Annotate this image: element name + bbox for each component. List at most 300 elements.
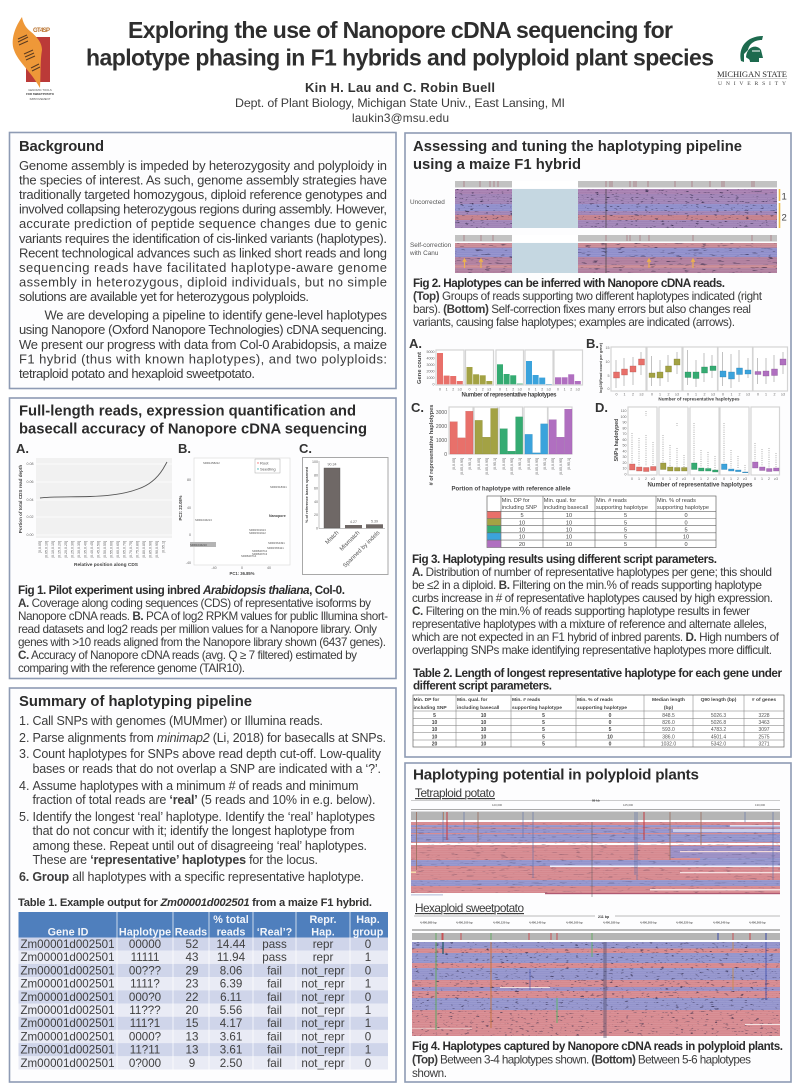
table 1: fail	[267, 1017, 282, 1030]
chart 3D: SNPs boxplots: ≥3	[774, 477, 778, 481]
legend table: script parameters: 10	[566, 513, 572, 519]
caption: figure 2: variants, causing false haplotypes; examples are indicated (arrows).	[413, 316, 735, 329]
table 1: 1	[365, 951, 371, 964]
table 1: fail	[267, 964, 282, 977]
chart 3A: gene count bars: 2	[512, 388, 514, 392]
chart 3B: read count boxplots: 0	[757, 392, 759, 396]
legend table: script parameters: including basecall	[544, 505, 588, 511]
chart A: coverage line: (0.95,1]	[162, 541, 166, 553]
table 2: 10	[432, 727, 437, 733]
logo: Michigan State University: MICHIGAN STATE	[717, 69, 787, 79]
chart 3C: reference allele bars: (0,0.05]	[452, 458, 456, 470]
table 1: Zm00001d002501	[20, 978, 115, 991]
caption: figure 1: genes with >10 reads aligned from the Nanopore library shown (6437 genes).	[18, 636, 386, 649]
table 2: supporting haplotype	[512, 705, 562, 711]
chart A: coverage line: (0.10,0.15]	[51, 541, 55, 558]
table 2: Q90 length (bp)	[701, 697, 737, 703]
table 1: 23	[186, 978, 198, 991]
logo: GT4SP: GENOMIC TOOLS	[28, 88, 52, 92]
caption: figure 3: representative haplotypes with a mixture of reference and alternate alleles,	[412, 618, 767, 631]
table 2: 3463	[758, 720, 770, 726]
chart 3B: read count boxplots: 0	[616, 392, 618, 396]
chart 3D: SNPs boxplots: 0	[693, 477, 695, 481]
chart 3D: SNPs boxplots: 0	[662, 477, 664, 481]
caption: figure 4	[412, 1040, 783, 1080]
table 1: fail	[267, 1004, 282, 1017]
table 2: Min. DP for	[414, 697, 439, 703]
caption: figure 3: overlapping SNPs make identifying representative haplotypes more difficult.	[412, 644, 772, 657]
table 1: Haplotype	[119, 926, 171, 938]
table 1: 3.61	[220, 1030, 242, 1043]
table 2: 10	[432, 720, 437, 726]
chart 3D: SNPs boxplots: ≥3	[682, 477, 686, 481]
chart 3B: read count boxplots: 2	[668, 392, 670, 396]
chart 3D: SNPs boxplots: 30	[622, 455, 626, 459]
chart 3A: gene count bars: 0	[499, 388, 501, 392]
chart A: coverage line: (0.05,0.10]	[44, 541, 48, 558]
table 1: Zm00001d002501	[20, 1004, 115, 1017]
table 1: 0	[365, 1030, 371, 1043]
chart C: accuracy bars: C.	[299, 441, 312, 456]
chart 3C: reference allele bars: C.	[411, 400, 424, 415]
table 2: 20	[432, 742, 437, 748]
table 1: Hap.	[311, 926, 335, 938]
table 1: 11???	[129, 1004, 161, 1017]
table 2: 4783.2	[711, 727, 726, 733]
table 2: 0	[609, 742, 612, 748]
text block: background paragraphs: using Nanopore (Oxford Nanopore Technologies) cDNA sequencing.	[19, 322, 387, 337]
legend table: script parameters: 5	[624, 535, 627, 541]
text block: background paragraphs: variants requires the identification of cis-linked variants (haplotypes).	[19, 231, 387, 246]
figure 4 bottom: sweetpotato reads: 4,400,100 bp	[456, 920, 473, 924]
table 1: 11?11	[130, 1044, 160, 1057]
table 1: Reads	[175, 926, 207, 938]
table 1: 0	[365, 991, 371, 1004]
table 2: supporting haplotype	[577, 705, 627, 711]
table 2: Min. qual. for	[457, 697, 488, 703]
table 1: 00000	[129, 938, 161, 951]
legend table: script parameters: supporting haplotype	[657, 505, 709, 511]
chart 3C: reference allele bars: (0.95,1]	[468, 458, 472, 470]
table 1: fail	[267, 1044, 282, 1057]
chart A: coverage line: (0.85,0.90]	[148, 541, 152, 558]
chart B: PCA: 40	[267, 566, 271, 570]
affiliation: Dept. of Plant Biology, Michigan State Univ., East Lansing, MI	[235, 96, 565, 110]
table 1: 43	[186, 951, 198, 964]
chart A: coverage line: (0.25,0.30]	[70, 541, 74, 558]
table 1: 9	[189, 1057, 195, 1070]
heading: assessing and tuning: Assessing and tuning the haplotyping pipeline	[413, 139, 742, 155]
table 1: Zm00001d002501	[20, 938, 115, 951]
chart C: accuracy bars: 5.39	[371, 520, 378, 524]
legend table: script parameters: 0	[684, 542, 688, 548]
figure 4 bottom: sweetpotato reads: 211 bp	[598, 915, 610, 919]
chart 3A: gene count bars: 2	[452, 388, 454, 392]
figure 2: read alignments	[409, 181, 787, 273]
chart 3D: SNPs boxplots: D.	[595, 400, 608, 415]
list: pipeline steps: 2.	[19, 731, 29, 745]
text block: background paragraphs: tetraploid potato and hexaploid sweetpotato.	[19, 366, 255, 381]
chart A: coverage line: (0.50,0.55]	[103, 541, 107, 558]
table 1: 52	[186, 938, 198, 951]
table 1: 13	[186, 1044, 198, 1057]
chart B: PCA: SRR1046213	[195, 518, 212, 522]
table 2: 10	[481, 713, 486, 719]
chart C: accuracy bars: 90.34	[328, 462, 336, 466]
chart C: accuracy bars: 100	[312, 460, 318, 464]
heading: assessing and tuning	[413, 139, 742, 173]
chart 3A: gene count bars: ≥3	[458, 388, 462, 392]
heading: full-length reads: Full-length reads, expression quantification and	[19, 404, 356, 420]
caption: figure 2	[413, 277, 763, 329]
chart C: accuracy bars: Spanned by indels	[342, 530, 381, 569]
table 1: group	[353, 926, 384, 938]
caption: figure 4: (Top) Between 3-4 haplotypes shown. (Bottom) Between 5-6 haplotypes	[412, 1054, 751, 1066]
table 1: % total	[213, 914, 249, 926]
chart 3A: gene count bars: Number of representative haplotypes	[462, 392, 557, 398]
chart 3C: reference allele bars: (0.95,1]	[493, 458, 497, 470]
chart 3B: read count boxplots: ≥3	[640, 392, 643, 396]
table 2	[413, 695, 784, 748]
table 1: 0	[365, 1057, 371, 1070]
figure 2: read alignments: 2	[782, 212, 787, 224]
chart 3A: gene count bars: ≥3	[487, 388, 491, 392]
chart C: accuracy bars: 0	[316, 526, 318, 530]
panel: background	[10, 132, 396, 388]
figure 4 bottom: sweetpotato reads: 4,400,080 bp	[420, 920, 437, 924]
chart B: PCA: SRR1501913	[249, 528, 266, 532]
chart 3A: gene count bars: ≥3	[547, 388, 551, 392]
chart 3D: SNPs boxplots: 0	[624, 472, 626, 476]
chart 3C: reference allele bars: 3000	[436, 410, 447, 416]
chart 3D: SNPs boxplots: 2	[768, 477, 770, 481]
table 2: 386.0	[662, 734, 675, 740]
chart A: coverage line: 0.00	[26, 533, 34, 537]
chart C: accuracy bars: 60	[314, 487, 318, 491]
table 1: not_repr	[301, 1044, 345, 1057]
chart 3B: read count boxplots: 0	[608, 387, 610, 391]
table 1: fail	[267, 1057, 282, 1070]
chart 3B: read count boxplots: 2	[704, 392, 706, 396]
legend table: script parameters: 20	[519, 542, 525, 548]
figure 4 bottom: sweetpotato reads: 4,400,120 bp	[493, 920, 510, 924]
table 2: 5342.0	[711, 742, 726, 748]
figure 4 top: potato reads	[411, 798, 780, 897]
chart A: coverage line: (0.30,0.35]	[77, 541, 81, 558]
chart B: PCA: Nanopore	[269, 514, 286, 518]
legend table: script parameters: 10	[566, 542, 572, 548]
chart 3D: SNPs boxplots: 1	[761, 477, 763, 481]
legend table: script parameters: 0	[684, 520, 688, 526]
chart B: PCA: SRR849712	[252, 549, 268, 553]
chart B: PCA: Seedling	[260, 466, 276, 472]
table 2: 3097	[758, 727, 770, 733]
caption: figure 1: Fig 1. Pilot experiment using inbred Arabidopsis thaliana, Col-0.	[18, 584, 345, 597]
caption: figure 1: comparing with the reference genome (TAIR10).	[18, 662, 245, 675]
chart 3C: reference allele bars: (0,0.05]	[502, 458, 506, 470]
chart 3C: reference allele bars: (0.05,0.95]	[559, 458, 563, 475]
right bars	[778, 189, 780, 228]
table 2: 5	[433, 713, 436, 719]
chart 3A: gene count bars: 2	[482, 388, 484, 392]
table 1: Zm00001d002501	[20, 991, 115, 1004]
caption: figure 3: which are not expected in an F1 hybrid of inbred parents. D. High numbers of	[411, 631, 780, 644]
table title: table 1: Table 1. Example output for Zm00001d002501 from a maize F1 hybrid.	[18, 897, 372, 909]
chart B: PCA: PC2: 22.08%	[178, 495, 183, 520]
chart 3D: SNPs boxplots: 2	[645, 477, 647, 481]
chart 3D: SNPs boxplots: 80	[622, 426, 626, 430]
table 1: ‘Real’?	[257, 926, 292, 938]
table 2: 848.5	[662, 713, 675, 719]
table 1: fail	[267, 1030, 282, 1043]
figure 2: read alignments: Uncorrected	[410, 199, 445, 206]
chart A: coverage line: (0.35,0.40]	[84, 541, 88, 558]
chart 3A: gene count bars: 4000	[426, 356, 434, 360]
chart 3B: read count boxplots: 5	[608, 374, 610, 378]
legend table: script parameters: 0	[684, 513, 688, 519]
list: pipeline steps: 6. Group all haplotypes with a specific representative haplotype.	[19, 870, 364, 884]
chart B: PCA: 0	[241, 566, 243, 570]
text block: background paragraphs: sequencing reads have facilitated haplotype-aware genome	[19, 260, 387, 275]
chart B: PCA: SRR849713	[252, 552, 268, 556]
caption: figure 1: A. Coverage along coding sequences (CDS) of representative isoforms by	[18, 597, 371, 610]
figure 4 top: potato reads: 89 kb	[592, 798, 600, 802]
table 1: 1	[365, 1017, 371, 1030]
legend table: script parameters: 10	[519, 528, 525, 534]
chart 3A: gene count bars: 2	[570, 388, 572, 392]
table 1: Zm00001d002501	[20, 951, 115, 964]
chart B: PCA: SRR849714	[241, 554, 257, 558]
chart A: coverage line	[16, 441, 172, 568]
chart 3D: SNPs boxplots: 10	[622, 467, 626, 471]
text block: background paragraphs: Recent technological advances such as linked short reads and long	[19, 245, 387, 260]
chart A: coverage line: (0.70,0.75]	[129, 541, 133, 558]
chart 3C: reference allele bars	[411, 400, 572, 492]
text block: background paragraphs: accurate prediction of peptide sequence changes due to genic	[19, 216, 388, 231]
table 2: 2575	[758, 734, 770, 740]
chart 3D: SNPs boxplots: 2	[707, 477, 709, 481]
chart 3A: gene count bars: 1000	[426, 376, 434, 380]
table 2: 10	[481, 734, 486, 740]
chart 3B: read count boxplots: log10(Read count per gene)	[599, 342, 603, 393]
table 2: 10	[481, 727, 486, 733]
table 2: Min. # reads	[512, 697, 541, 703]
table 2: # of genes	[752, 697, 776, 703]
chart A: coverage line: (0.20,0.25]	[64, 541, 68, 558]
subheading: tetraploid potato: Tetraploid potato	[415, 786, 495, 800]
table 2: 0	[609, 713, 612, 719]
chart B: PCA: SRR1565421	[267, 546, 284, 550]
caption: figure 3: be ≤2 in a diploid. B. Filtering on the min.% of reads supporting haplotype	[412, 579, 762, 592]
chart 3B: read count boxplots: 1	[659, 392, 661, 396]
table 1: 14.44	[216, 938, 246, 951]
chart C: accuracy bars: 40	[314, 500, 318, 504]
chart 3D: SNPs boxplots: 90	[622, 421, 626, 425]
legend table: script parameters: Min. # reads	[596, 498, 627, 504]
chart A: coverage line: (0.60,0.65]	[116, 541, 120, 558]
table 1: fail	[267, 978, 282, 991]
legend table: script parameters: 10	[519, 520, 525, 526]
caption: figure 3: A. Distribution of number of representative haplotypes per gene; this should	[412, 566, 772, 579]
chart 3B: read count boxplots: ≥3	[711, 392, 715, 396]
text block: background paragraphs: traditionally targeted homozygous, diploid reference genotypes and	[19, 187, 387, 202]
legend table: script parameters: supporting haplotype	[596, 505, 648, 511]
chart 3A: gene count bars: 1	[564, 388, 566, 392]
chart 3D: SNPs boxplots: 0	[754, 477, 756, 481]
table 1: fail	[267, 991, 282, 1004]
chart 3B: read count boxplots: B.	[586, 336, 599, 351]
table 2: 5026.8	[711, 720, 726, 726]
table 1: 111?1	[130, 1017, 160, 1030]
chart C: accuracy bars: 80	[314, 473, 318, 477]
list: pipeline steps: bases or reads that do not overlap a SNP are indicated with a ‘?’.	[32, 762, 381, 776]
text block: background paragraphs: the species of interest. As such, genome assembly strategies have	[19, 173, 387, 188]
figure 2: read alignments: 1	[782, 192, 787, 202]
figure 4 bottom: sweetpotato reads: 4,400,200 bp	[640, 920, 657, 924]
table 1: not_repr	[301, 1057, 345, 1070]
chart C: accuracy bars: 4.27	[350, 520, 357, 524]
panel: full-length reads	[10, 398, 396, 678]
legend table: script parameters: 5	[520, 513, 524, 519]
list: pipeline steps: These are ‘representative’ haplotypes for the locus.	[32, 853, 318, 867]
chart 3A: gene count bars: 1	[535, 388, 537, 392]
list: pipeline steps: Identify the longest ‘real’ haplotype. Identify the ‘real’ haplotypes	[32, 810, 375, 824]
chart 3B: read count boxplots: 10	[606, 360, 610, 364]
text block: background paragraphs: solutions are available yet for heterozygous polyploids.	[19, 289, 309, 304]
chart 3D: SNPs boxplots: SNPs haplotyped	[614, 419, 620, 461]
chart B: PCA: B.	[178, 441, 191, 456]
chart 3D: SNPs boxplots: 100	[620, 415, 626, 419]
chart 3C: reference allele bars: (0.05,0.95]	[460, 458, 464, 475]
list: pipeline steps: that do not concur with it; identify the longest haplotype from	[32, 824, 354, 838]
table 2: 5	[542, 720, 545, 726]
figure 4 bottom: sweetpotato reads: 4,400,160 bp	[566, 920, 583, 924]
table 1: Zm00001d002501	[20, 1017, 115, 1030]
table 1: repr	[313, 951, 333, 964]
legend table: script parameters: including SNP	[502, 505, 537, 511]
chart A: coverage line: Portion of total CDS read depth	[18, 465, 23, 533]
chart A: coverage line: [0,0.05]	[38, 541, 42, 553]
chart B: PCA: 0	[189, 533, 191, 537]
chart A: coverage line: A.	[16, 441, 29, 456]
email: laukin3@msu.edu	[352, 111, 449, 125]
table 1: 8.06	[220, 964, 242, 977]
title: haplotype phasing in F1 hybrids and polyploid plant species	[86, 44, 714, 70]
chart 3A: gene count bars: 2	[541, 388, 543, 392]
list: pipeline steps: Assume haplotypes with a minimum # of reads and minimum	[32, 779, 358, 793]
chart 3B: read count boxplots: 2	[774, 392, 776, 396]
caption: figure 1: C. Accuracy of Nanopore cDNA reads (avg. Q ≥ 7 filtered) estimated by	[18, 649, 357, 662]
chart A: coverage line: (0.40,0.45]	[90, 541, 94, 558]
chart A: coverage line: (0.65,0.70]	[122, 541, 126, 558]
logo: GT4SP: IMPROVEMENT	[30, 97, 51, 101]
table 1: 6.11	[220, 991, 242, 1004]
table 2: 5	[542, 734, 545, 740]
list: pipeline steps: Call SNPs with genomes (MUMmer) or Illumina reads.	[32, 714, 323, 728]
chart 3A: gene count bars: 0	[528, 388, 530, 392]
chart 3C: reference allele bars: 0	[444, 452, 447, 458]
table 1: 5.56	[220, 1004, 242, 1017]
chart 3C: reference allele bars: (0,0.05]	[527, 458, 531, 470]
figure 2: read alignments: with Canu	[409, 250, 439, 257]
chart 3A: gene count bars: 0	[432, 382, 434, 386]
heading: full-length reads: basecall accuracy of Nanopore cDNA sequencing	[19, 422, 367, 438]
table 1: 0000?	[129, 1030, 162, 1043]
chart 3C: reference allele bars: (0.95,1]	[543, 458, 547, 470]
table 1: Hap.	[356, 914, 380, 926]
table 2: 826.0	[662, 720, 675, 726]
list: pipeline steps: among these. Repeat until out of disagreeing ‘real’ haplotypes.	[32, 839, 367, 853]
legend table: script parameters: 5	[624, 520, 627, 526]
table 2: Min. % of reads	[577, 697, 613, 703]
chart 3C: reference allele bars: (0.05,0.95]	[510, 458, 514, 475]
chart 3D: SNPs boxplots: 110	[621, 409, 626, 413]
table 1: Zm00001d002501	[20, 964, 115, 977]
heading: background: Background	[19, 139, 104, 155]
chart 3B: read count boxplots: 0	[651, 392, 653, 396]
table 1: 15	[186, 1017, 198, 1030]
chart 3C: reference allele bars: Portion of haplotype with reference allele	[452, 486, 571, 492]
figure 4 bottom: sweetpotato reads: 4,400,180 bp	[603, 920, 620, 924]
table 1: pass	[262, 938, 287, 951]
figure 4 bottom: sweetpotato reads: 4,400,140 bp	[529, 920, 546, 924]
chart 3D: SNPs boxplots: 2	[676, 477, 678, 481]
chart 3B: read count boxplots: 0	[687, 392, 689, 396]
chart 3A: gene count bars: 1	[506, 388, 508, 392]
table 1: not_repr	[301, 1030, 345, 1043]
table 2: (bp)	[664, 705, 673, 711]
logo: GT4SP: FOR SWEETPOTATO	[26, 92, 55, 96]
legend table: script parameters: 5	[624, 542, 627, 548]
subheading: hexaploid sweetpotato: Hexaploid sweetpotato	[415, 901, 524, 915]
table 2: 0	[609, 720, 612, 726]
table 2: 10	[481, 720, 486, 726]
caption: figure 2: Fig 2. Haplotypes can be inferred with Nanopore cDNA reads.	[413, 277, 725, 290]
legend table: script parameters: 10	[566, 520, 572, 526]
chart 3B: read count boxplots: 2	[738, 392, 740, 396]
chart 3D: SNPs boxplots: ≥3	[651, 477, 655, 481]
caption: figure 4: Fig 4. Haplotypes captured by Nanopore cDNA reads in polyploid plants.	[412, 1040, 783, 1053]
figure 4 bottom: sweetpotato reads: 4,400,240 bp	[713, 920, 730, 924]
chart 3D: SNPs boxplots: 1	[638, 477, 640, 481]
list: pipeline steps: fraction of total reads are ‘real’ (5 reads and 10% in e.g. below).	[32, 793, 376, 807]
table 2: 5026.3	[711, 713, 726, 719]
text block: background paragraphs: We present our progress with data from Col-0 Arabidopsis, a maize	[19, 337, 387, 352]
table 1: repr	[313, 938, 333, 951]
table 1: not_repr	[301, 1017, 345, 1030]
chart 3D: SNPs boxplots: ≥3	[713, 477, 717, 481]
title	[86, 17, 714, 70]
chart A: coverage line: 0.02	[26, 515, 34, 519]
caption: figure 1: read datasets and log2 reads per million values for a Nanopore library. Only	[18, 623, 377, 636]
chart A: coverage line: (0.45,0.50]	[96, 541, 100, 558]
legend table: script parameters: 5	[624, 513, 627, 519]
chart 3C: reference allele bars: (0,0.05]	[477, 458, 481, 470]
table 2: including basecall	[457, 705, 500, 711]
chart 3C: reference allele bars: (0.05,0.95]	[485, 458, 489, 475]
legend table: script parameters: 10	[683, 535, 689, 541]
table 1: 1	[365, 1004, 371, 1017]
list: pipeline steps: Parse alignments from minimap2 (Li, 2018) for basecalls at SNPs.	[32, 731, 386, 745]
chart C: accuracy bars	[299, 441, 388, 574]
figure 4 top: potato reads: 125,000	[623, 803, 634, 807]
list: pipeline steps: 3.	[19, 747, 29, 761]
chart A: coverage line: (0.15,0.20]	[58, 541, 62, 558]
chart A: coverage line: (0.90,0.95]	[155, 541, 159, 558]
chart 3A: gene count bars: 1	[475, 388, 477, 392]
chart 3D: SNPs boxplots: 20	[622, 461, 626, 465]
chart 3D: SNPs boxplots: 1	[700, 477, 702, 481]
